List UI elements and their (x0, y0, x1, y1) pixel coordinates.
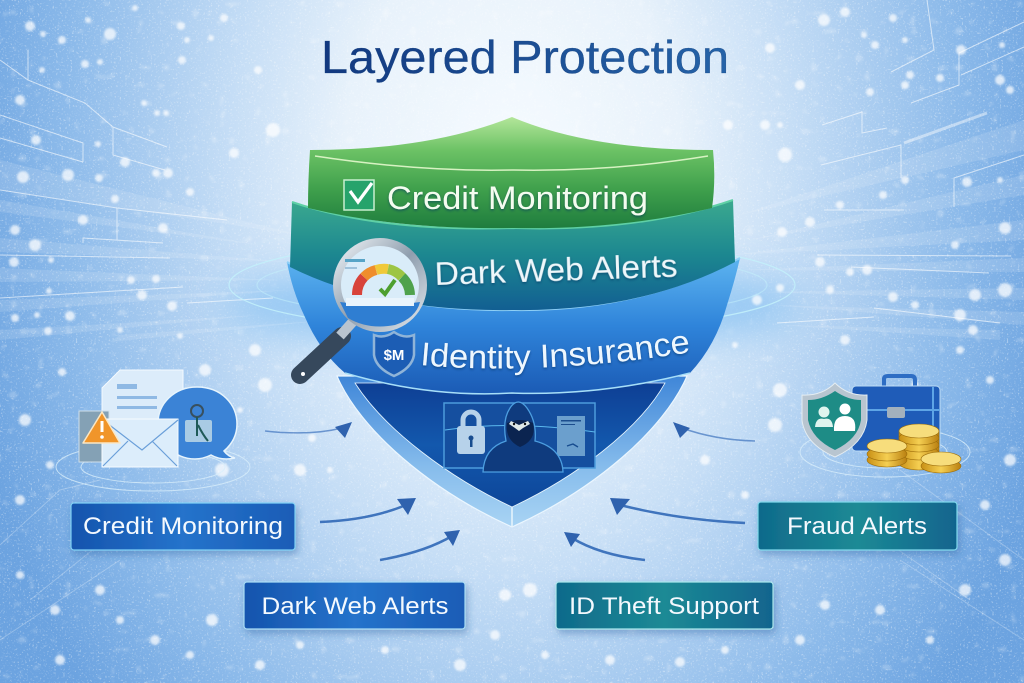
icon: speech bubble with key (158, 387, 237, 459)
icon: document (102, 370, 183, 445)
label: Credit Monitoring (71, 503, 295, 550)
gray panel (79, 411, 109, 462)
shield lower: rim and dark core (337, 376, 687, 527)
layered shield (286, 117, 740, 528)
icon: hooded hacker (483, 402, 563, 472)
icon group: documents, alert, email, key bubble (56, 370, 250, 491)
label: ID Theft Support (556, 582, 773, 629)
icon: padlock (457, 412, 485, 454)
icon: magnifying glass with gauge (300, 242, 423, 376)
label: Credit Monitoring: Credit Monitoring (83, 513, 283, 540)
title: Layered Protection (321, 31, 729, 83)
icon: warning triangle (83, 412, 120, 443)
icon group: shield, briefcase, coins (800, 376, 970, 477)
gauge (357, 269, 410, 295)
layer: Dark Web Alerts (290, 200, 735, 310)
icon: people shield (802, 383, 867, 457)
layer: Dark Web Alerts: Dark Web Alerts (434, 248, 678, 292)
layer: Identity Insurance (286, 257, 740, 395)
icon: checkbox (344, 180, 374, 210)
arrows pointing to shield (265, 422, 755, 560)
label: Identity Insurance (420, 352, 692, 368)
icon: document (557, 416, 585, 456)
icon: dollar shield: $M (384, 347, 404, 364)
label: ID Theft Support: ID Theft Support (569, 593, 759, 620)
label: Dark Web Alerts (244, 582, 465, 629)
icon: envelope (102, 419, 178, 467)
orbit rings behind shield (229, 238, 795, 332)
label: Fraud Alerts: Fraud Alerts (787, 513, 927, 540)
layer: Credit Monitoring (308, 117, 714, 228)
icon: briefcase (852, 376, 940, 451)
label: Dark Web Alerts: Dark Web Alerts (262, 593, 448, 620)
hacker screen (444, 402, 595, 472)
layer: Identity Insurance: Identity Insurance (422, 336, 689, 378)
label: Fraud Alerts (758, 502, 957, 550)
layer: Credit Monitoring: Credit Monitoring (387, 180, 648, 216)
icon: coin stacks (867, 424, 961, 473)
icon: dollar shield (374, 332, 414, 376)
